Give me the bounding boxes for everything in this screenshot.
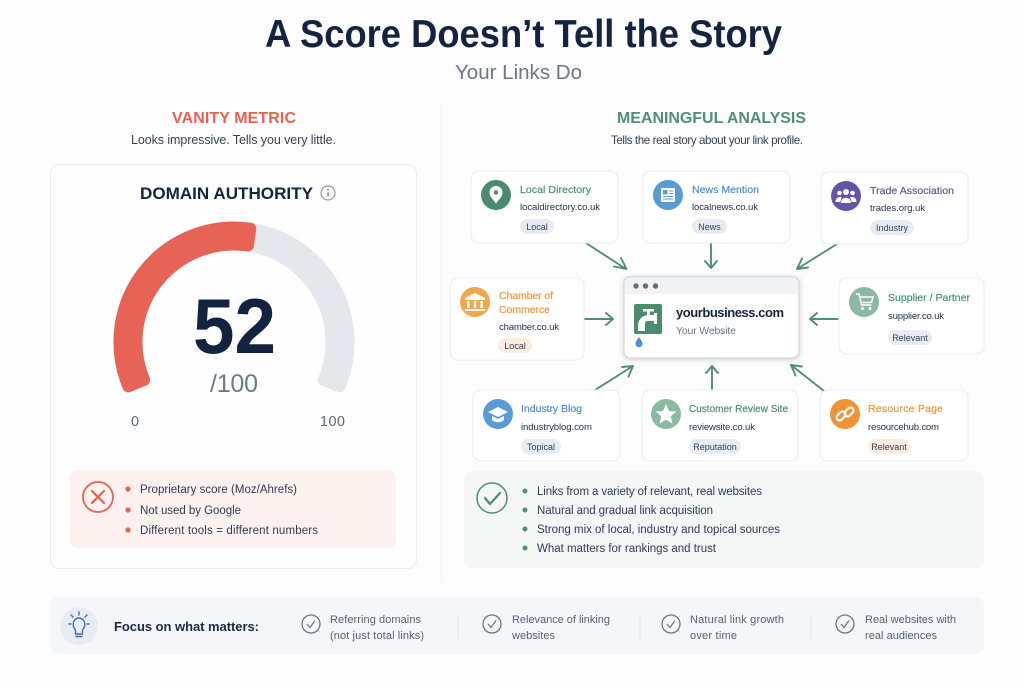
chart: gauge bbox=[119, 228, 348, 386]
card: local directory: Local bbox=[526, 222, 548, 232]
card: trade association: Industry bbox=[876, 223, 909, 233]
icon: newspaper bbox=[653, 180, 683, 210]
card: supplier partner: Supplier / Partner bbox=[888, 292, 970, 304]
panel: benefits: Links from a variety of relevant, real websites bbox=[537, 486, 762, 498]
item: real websites: Real websites with bbox=[865, 614, 956, 626]
panel: benefits: Natural and gradual link acquisition bbox=[537, 505, 713, 517]
panel: focus bar: Focus on what matters: bbox=[114, 619, 259, 634]
card: news mention: News Mention bbox=[692, 184, 759, 196]
card: industry blog: Industry Blog bbox=[521, 403, 582, 415]
card: resource page: Relevant bbox=[871, 442, 907, 452]
card: chamber of commerce: chamber.co.uk bbox=[499, 322, 559, 333]
icon: cross bbox=[83, 482, 113, 512]
card: chamber of commerce: Commerce bbox=[499, 304, 550, 316]
item: referring domains: (not just total links) bbox=[330, 630, 424, 642]
item: real websites: real audiences bbox=[865, 630, 938, 642]
card: supplier partner: Relevant bbox=[892, 333, 928, 343]
panel: drawbacks: Not used by Google bbox=[140, 505, 241, 517]
card: supplier partner: supplier.co.uk bbox=[888, 311, 944, 322]
central website window: yourbusiness.com bbox=[676, 305, 784, 320]
gauge label: 100: 100 bbox=[320, 414, 345, 430]
heading: meaningful analysis: MEANINGFUL ANALYSIS bbox=[617, 110, 806, 127]
item: relevance: Relevance of linking bbox=[512, 614, 610, 626]
icon: chain link bbox=[830, 399, 860, 429]
gauge maximum: /100 bbox=[210, 370, 258, 398]
card: customer review site: Reputation bbox=[693, 442, 737, 452]
gauge value: 52 bbox=[193, 282, 276, 370]
card: resource page: Resource Page bbox=[868, 403, 943, 415]
item: natural growth: over time bbox=[690, 630, 737, 642]
text: meaningful subheading: Tells the real story about your link profile. bbox=[611, 134, 803, 147]
card: chamber of commerce: Chamber of bbox=[499, 290, 553, 302]
icon: map pin bbox=[481, 180, 511, 210]
icon: people bbox=[831, 181, 861, 211]
card: local directory: Local Directory bbox=[520, 184, 592, 196]
card: customer review site bbox=[642, 390, 798, 461]
card: industry blog: Topical bbox=[527, 442, 555, 452]
panel: benefits bbox=[464, 471, 984, 568]
item: relevance: websites bbox=[511, 630, 556, 642]
icon: check circle bbox=[477, 483, 507, 513]
central website window bbox=[624, 277, 799, 358]
panel: domain authority bbox=[50, 164, 416, 568]
icon: star bbox=[651, 399, 681, 429]
panel: benefits: Strong mix of local, industry and topical sources bbox=[537, 524, 780, 536]
text: vanity subheading: Looks impressive. Tells you very little. bbox=[131, 133, 336, 147]
card: chamber of commerce bbox=[450, 278, 584, 360]
card: industry blog bbox=[473, 390, 620, 461]
item: natural growth bbox=[662, 614, 784, 642]
item: relevance bbox=[483, 614, 610, 642]
panel: benefits: What matters for rankings and trust bbox=[537, 543, 717, 555]
icon: tap bbox=[634, 304, 662, 347]
panel: drawbacks bbox=[70, 470, 396, 548]
card: industry blog: industryblog.com bbox=[521, 422, 592, 433]
panel: drawbacks: Proprietary score (Moz/Ahrefs) bbox=[140, 484, 297, 496]
icon: graduation cap bbox=[483, 399, 513, 429]
gauge label: 0: 0 bbox=[131, 414, 139, 430]
card: supplier partner bbox=[839, 278, 984, 354]
title: A Score Doesn’t Tell the Story bbox=[265, 13, 783, 56]
card: resource page: resourcehub.com bbox=[868, 422, 939, 433]
card: trade association: Trade Association bbox=[870, 185, 954, 197]
heading: vanity metric: VANITY METRIC bbox=[172, 110, 296, 127]
card: news mention bbox=[643, 171, 790, 243]
central website window: Your Website bbox=[676, 325, 736, 337]
arrows to website bbox=[584, 243, 839, 391]
card: trade association: trades.org.uk bbox=[870, 203, 925, 214]
card: resource page bbox=[820, 390, 968, 461]
item: referring domains: Referring domains bbox=[330, 614, 422, 626]
item: real websites bbox=[836, 614, 956, 642]
icon: info bbox=[321, 186, 335, 200]
icon: cart bbox=[849, 287, 879, 317]
card: news mention: localnews.co.uk bbox=[692, 202, 758, 213]
subtitle: Your Links Do bbox=[455, 61, 582, 84]
panel: drawbacks: Different tools = different numbers bbox=[140, 525, 318, 537]
card: customer review site: reviewsite.co.uk bbox=[689, 422, 755, 433]
card: local directory bbox=[471, 171, 618, 243]
icon: building bbox=[460, 287, 490, 317]
card: local directory: localdirectory.co.uk bbox=[520, 202, 600, 213]
item: natural growth: Natural link growth bbox=[690, 614, 784, 626]
item: referring domains bbox=[302, 614, 424, 642]
card: chamber of commerce: Local bbox=[504, 341, 526, 351]
card: news mention: News bbox=[698, 222, 721, 232]
card: customer review site: Customer Review Site bbox=[689, 404, 788, 415]
icon: light bulb bbox=[60, 607, 98, 645]
panel: focus bar bbox=[50, 597, 984, 654]
heading: domain authority: DOMAIN AUTHORITY bbox=[140, 184, 314, 203]
card: trade association bbox=[821, 172, 968, 244]
